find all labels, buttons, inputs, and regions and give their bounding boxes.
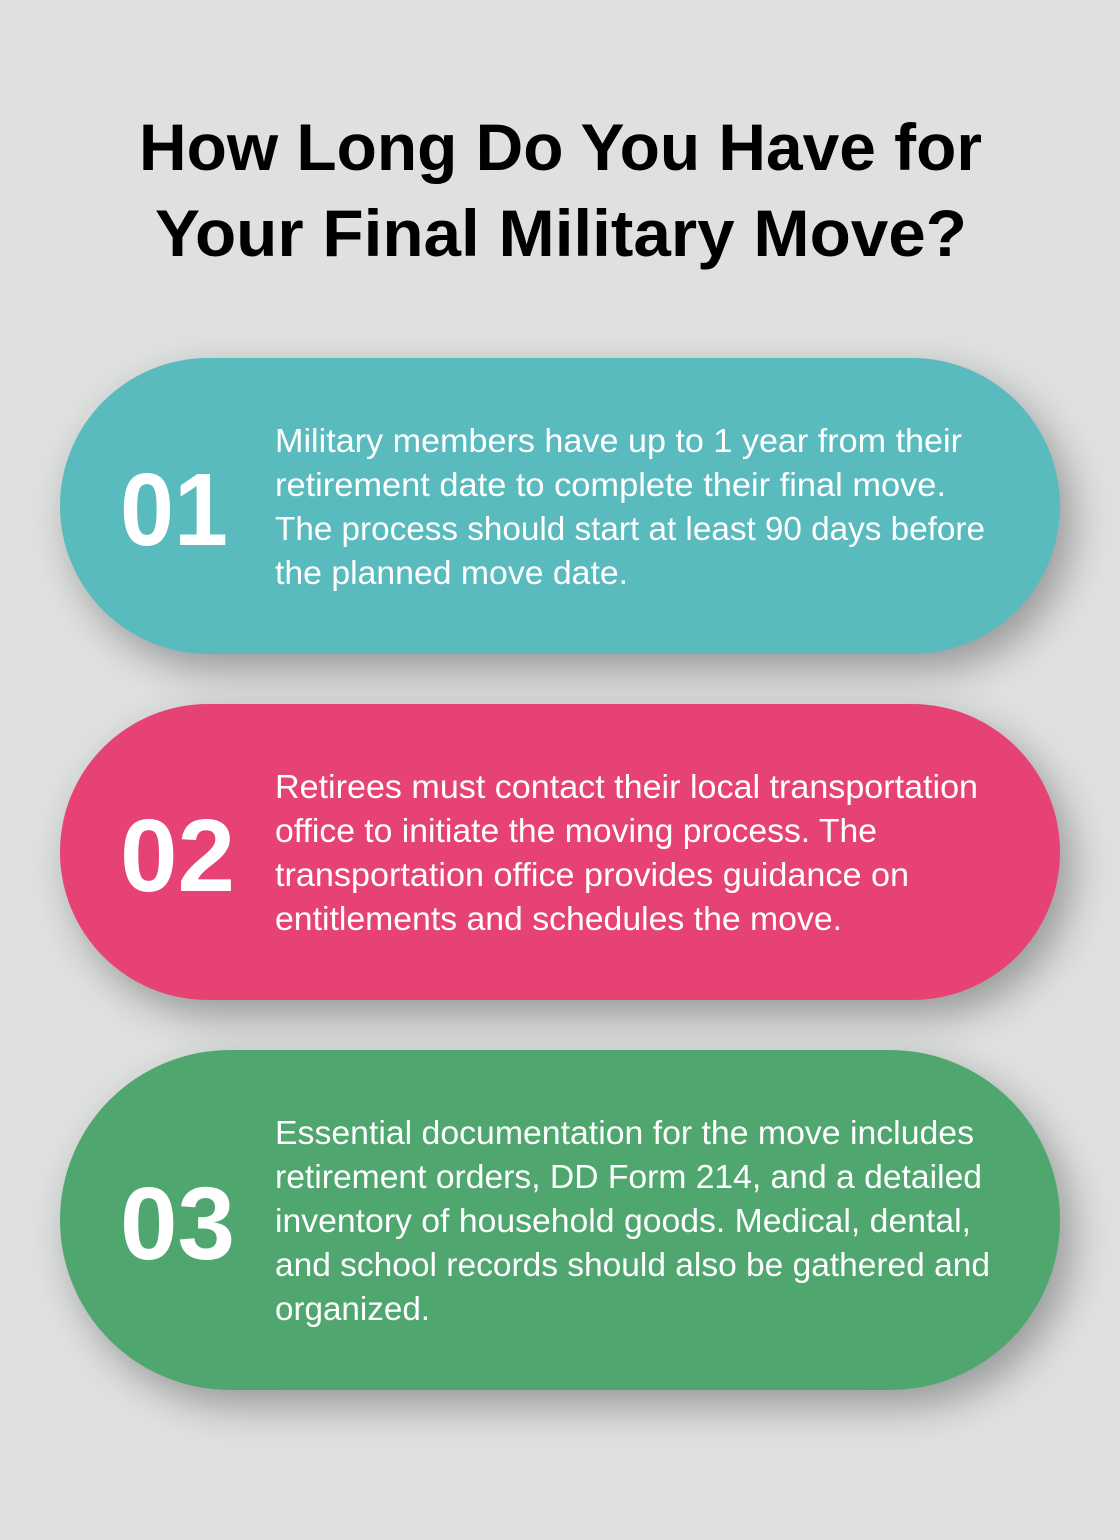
step 1 text: [275, 422, 985, 591]
step 3 text: [275, 1114, 990, 1327]
panel: step 1 background: [60, 358, 1060, 654]
step 3 text: Essential documentation for the move includes: [275, 1114, 974, 1151]
step 3 text: and school records should also be gathered and: [275, 1246, 990, 1283]
step 3 text: retirement orders, DD Form 214, and a detailed: [275, 1158, 982, 1195]
step 2 text: entitlements and schedules the move.: [275, 900, 842, 937]
step 1 text: the planned move date.: [275, 554, 628, 591]
step 2 text: office to initiate the moving process. The: [275, 812, 877, 849]
step 2 text: [275, 768, 978, 937]
panel: step 2 background: [60, 704, 1060, 1000]
step 3 number: 03: [120, 1166, 235, 1281]
step 3 text: inventory of household goods. Medical, dental,: [275, 1202, 971, 1239]
step 2 text: transportation office provides guidance on: [275, 856, 909, 893]
title: Your Final Military Move?: [155, 196, 967, 270]
panel: step 3 background: [60, 1050, 1060, 1390]
title: [139, 110, 982, 270]
step 1 text: retirement date to complete their final move.: [275, 466, 946, 503]
step 3 text: organized.: [275, 1290, 430, 1327]
step 1 text: The process should start at least 90 days before: [275, 510, 985, 547]
title: How Long Do You Have for: [139, 110, 982, 184]
step 2 text: Retirees must contact their local transportation: [275, 768, 978, 805]
step 2 number: 02: [120, 798, 235, 913]
step 1 number: 01: [120, 452, 228, 567]
step 1 text: Military members have up to 1 year from their: [275, 422, 962, 459]
